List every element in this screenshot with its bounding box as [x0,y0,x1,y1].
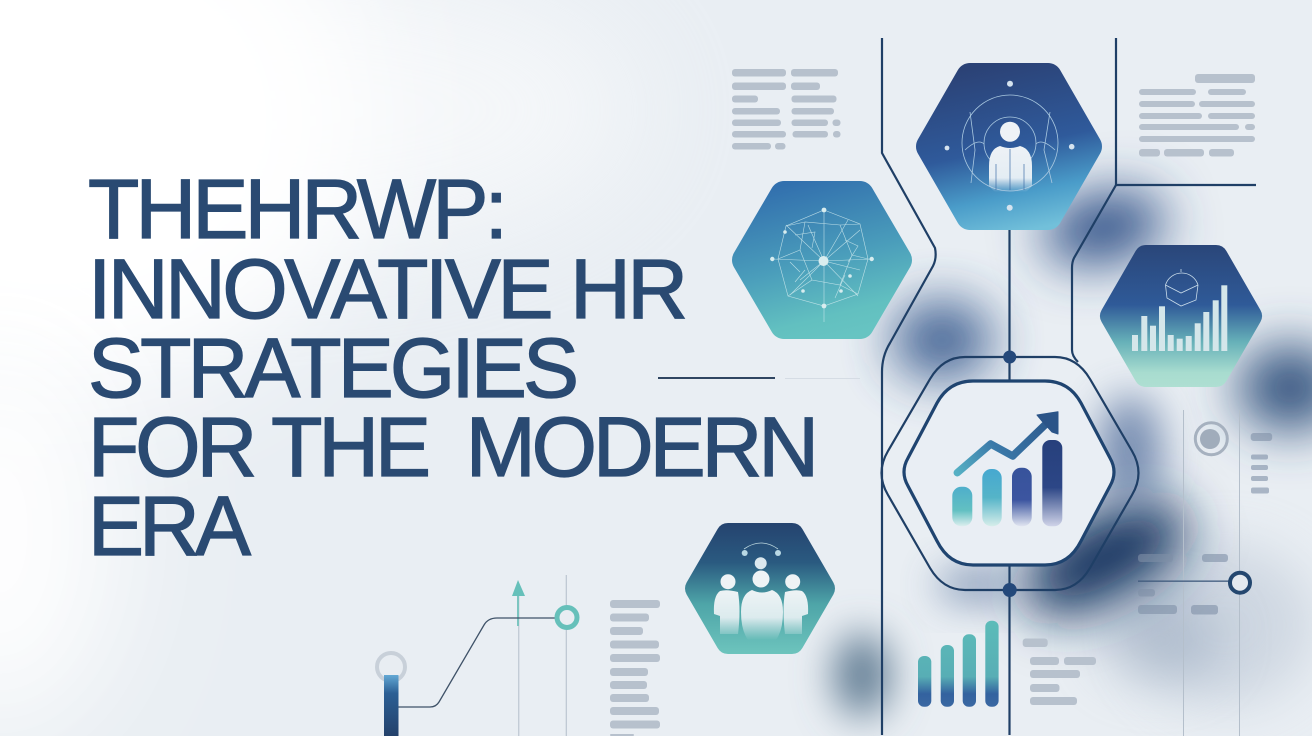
title: ERA [88,479,251,573]
growth arrow [957,412,1058,473]
satellite dots [945,81,1074,211]
faded data panel: right [1138,410,1272,736]
line graph: bottom left [377,575,577,736]
hexagon: team [697,535,823,642]
title: STRATEGIES [88,321,579,415]
divider line [658,377,860,379]
title: INNOVATIVE HR [88,242,688,336]
junction nodes [1003,350,1017,597]
person icon rings [962,95,1058,191]
title: THEHRWP: [88,162,508,256]
arc and dots [742,543,781,569]
mini bars [1132,285,1227,351]
faded labels [1138,433,1272,614]
faded gauge icon [1195,423,1227,455]
target icon [1166,269,1198,306]
text placeholder: bottom middle [1023,638,1096,705]
central hexagon with growth chart [904,381,1114,565]
bar chart: bottom [918,621,999,707]
team figures [714,570,808,640]
outer hexagon outline [882,357,1138,590]
text placeholder: top left [732,69,840,150]
network nodes [770,208,874,308]
person figure [989,122,1032,192]
hexagon: person [930,77,1088,216]
text placeholder: top right [1139,74,1255,156]
hexagon: analytics [1112,257,1250,375]
circuit lines [882,38,1256,735]
network icon [772,208,872,322]
blurred shadows [834,182,1312,717]
title [88,162,819,573]
title: FOR THE MODERN [88,400,819,494]
bars [952,440,1062,526]
background [0,0,578,718]
hexagon: network [746,195,898,325]
text placeholder: bottom center [610,600,660,736]
connector with ring [1138,573,1250,593]
